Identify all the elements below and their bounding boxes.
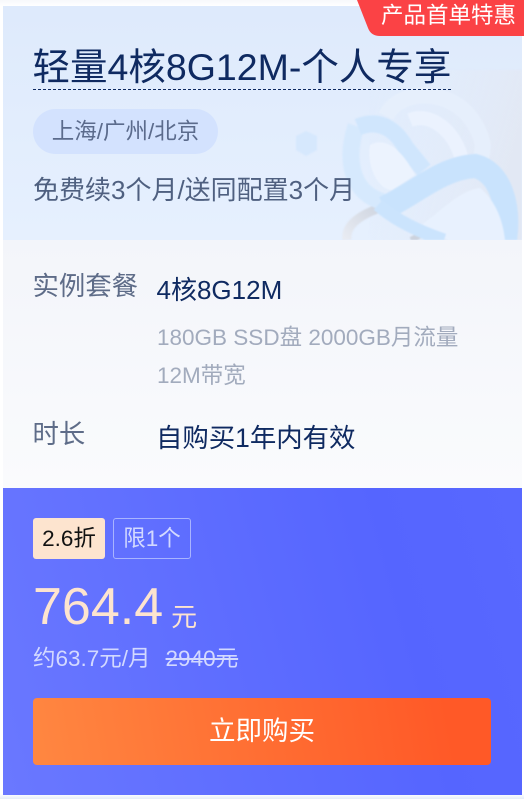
badge: first order offer: 产品首单特惠 [381, 3, 516, 28]
description: package details: 12M带宽 [157, 363, 246, 388]
tag: purchase limit: 限1个 [123, 526, 181, 551]
tag: discount: 2.6折 [42, 526, 96, 551]
monthly and original price: 约63.7元/月 2940元 [33, 646, 238, 671]
value: package name: 4核8G12M [156, 275, 282, 305]
panel: product header [3, 6, 522, 240]
button: buy now: 立即购买 [209, 716, 315, 746]
tag: regions: 上海/广州/北京 [52, 119, 199, 144]
price: 764.4 元 [33, 578, 197, 636]
label: duration: 时长 [32, 419, 85, 449]
promo text: 免费续3个月/送同配置3个月 [33, 175, 355, 205]
label: instance package: 实例套餐 [32, 271, 138, 301]
panel: specifications [3, 240, 522, 488]
tag: discount [33, 518, 105, 559]
description: package details [157, 325, 458, 388]
icon: small cube [296, 131, 317, 156]
tag: purchase limit [113, 518, 191, 559]
title: 轻量4核8G12M-个人专享 [32, 46, 451, 88]
illustration: translucent ribbon [296, 100, 521, 240]
badge: first order offer [357, 0, 524, 36]
button: buy now [33, 698, 491, 765]
tag: regions [33, 109, 218, 154]
description: package details: 180GB SSD盘 2000GB月流量 [157, 325, 458, 350]
panel: price [3, 488, 522, 795]
value: duration: 自购买1年内有效 [156, 423, 355, 453]
